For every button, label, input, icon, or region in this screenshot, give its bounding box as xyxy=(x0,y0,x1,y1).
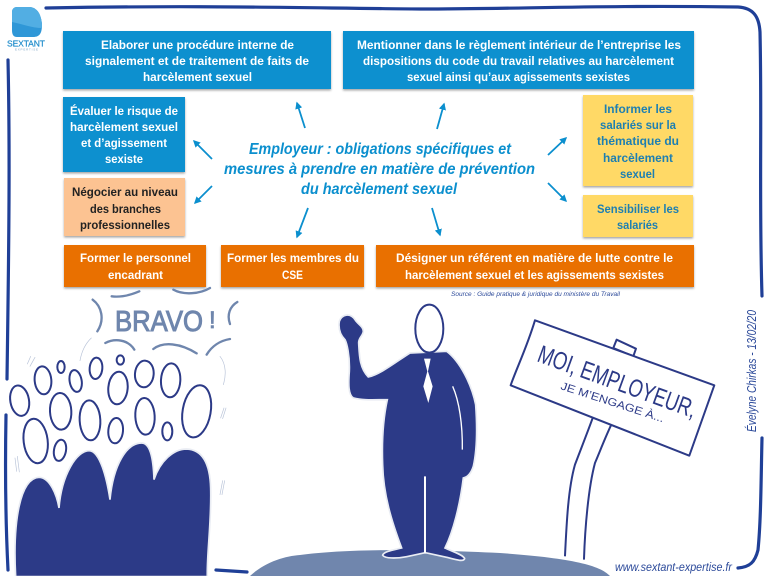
website: www.sextant-expertise.fr xyxy=(615,560,733,574)
box: mentionner dans le règlement intérieur: Mentionner dans le règlement intérieur de l’entreprise les xyxy=(357,40,681,52)
body xyxy=(339,315,477,560)
signpost: MOI, EMPLOYEUR, xyxy=(534,340,700,424)
central title: Employeur : obligations spécifiques et xyxy=(249,141,512,158)
box: évaluer le risque xyxy=(63,97,185,172)
box: informer les salariés: Informer les xyxy=(604,104,672,116)
box: mentionner dans le règlement intérieur xyxy=(343,31,694,89)
panel xyxy=(511,320,714,456)
central title: mesures à prendre en matière de prévention xyxy=(224,161,535,178)
logo: Sextant xyxy=(7,7,45,52)
box: former le personnel encadrant: Former le personnel xyxy=(80,253,191,265)
logo: Sextant: SEXTANT xyxy=(7,38,45,48)
box: négocier au niveau des branches: Négocier au niveau xyxy=(72,187,178,199)
box: négocier au niveau des branches: professionnelles xyxy=(80,220,170,232)
box: négocier au niveau des branches: des branches xyxy=(90,204,161,216)
box: désigner un référent: Désigner un référent en matière de lutte contre le xyxy=(396,253,673,265)
central title xyxy=(224,141,535,198)
box: sensibiliser les salariés xyxy=(583,195,693,237)
employer figure xyxy=(339,305,477,560)
box: informer les salariés xyxy=(583,95,693,186)
box: désigner un référent: harcèlement sexuel et les agissements sexistes xyxy=(405,270,664,282)
crowd heads xyxy=(8,355,215,465)
central title: du harcèlement sexuel xyxy=(301,181,458,198)
tie xyxy=(423,359,433,403)
crowd bodies xyxy=(15,443,211,576)
arm line xyxy=(453,386,462,450)
ground xyxy=(250,550,610,576)
box: former les membres du CSE: CSE xyxy=(282,270,303,282)
box: évaluer le risque: et d’agissement xyxy=(81,138,167,150)
box: désigner un référent xyxy=(376,245,694,287)
tab xyxy=(613,340,636,356)
box: former le personnel encadrant xyxy=(64,245,206,287)
signpost: JE M’ENGAGE À... xyxy=(559,379,666,425)
bravo shout: ! xyxy=(209,307,216,334)
post xyxy=(565,416,612,560)
box: évaluer le risque: Évaluer le risque de xyxy=(70,105,178,118)
arrows from the centre xyxy=(194,103,566,237)
box: mentionner dans le règlement intérieur: dispositions du code du travail relatives au harcèlement xyxy=(363,56,674,68)
box: élaborer une procédure: harcèlement sexuel xyxy=(143,72,252,84)
box: négocier au niveau des branches xyxy=(64,178,185,236)
leg gap xyxy=(422,476,428,553)
signature: Évelyne Chirkas - 13/02/20 xyxy=(744,310,759,432)
box: former les membres du CSE xyxy=(221,245,364,287)
box: mentionner dans le règlement intérieur: sexuel ainsi qu’aux agissements sexistes xyxy=(407,72,630,84)
box: sensibiliser les salariés: salariés xyxy=(617,220,658,232)
box: élaborer une procédure: Elaborer une procédure interne de xyxy=(101,40,294,52)
bravo shout: BRAVO xyxy=(115,306,203,338)
box: élaborer une procédure xyxy=(63,31,331,89)
box: former les membres du CSE: Former les membres du xyxy=(227,253,359,265)
box: informer les salariés: thématique du xyxy=(597,136,679,148)
box: informer les salariés: sexuel xyxy=(620,169,655,181)
crowd xyxy=(8,355,215,576)
box: sensibiliser les salariés: Sensibiliser les xyxy=(597,204,679,216)
box: élaborer une procédure: signalement et de traitement de faits de xyxy=(85,56,309,68)
box: évaluer le risque: sexiste xyxy=(105,154,143,166)
signpost xyxy=(511,320,714,560)
box: évaluer le risque: harcèlement sexuel xyxy=(70,122,178,134)
box: informer les salariés: harcèlement xyxy=(603,153,673,165)
head xyxy=(415,305,443,353)
logo: Sextant: EXPERTISE xyxy=(15,48,38,52)
box: former le personnel encadrant: encadrant xyxy=(108,270,163,282)
bravo shout xyxy=(15,288,237,495)
source note: Source : Guide pratique & juridique du ministère du Travail xyxy=(451,291,621,298)
box: informer les salariés: salariés sur la xyxy=(600,120,677,132)
